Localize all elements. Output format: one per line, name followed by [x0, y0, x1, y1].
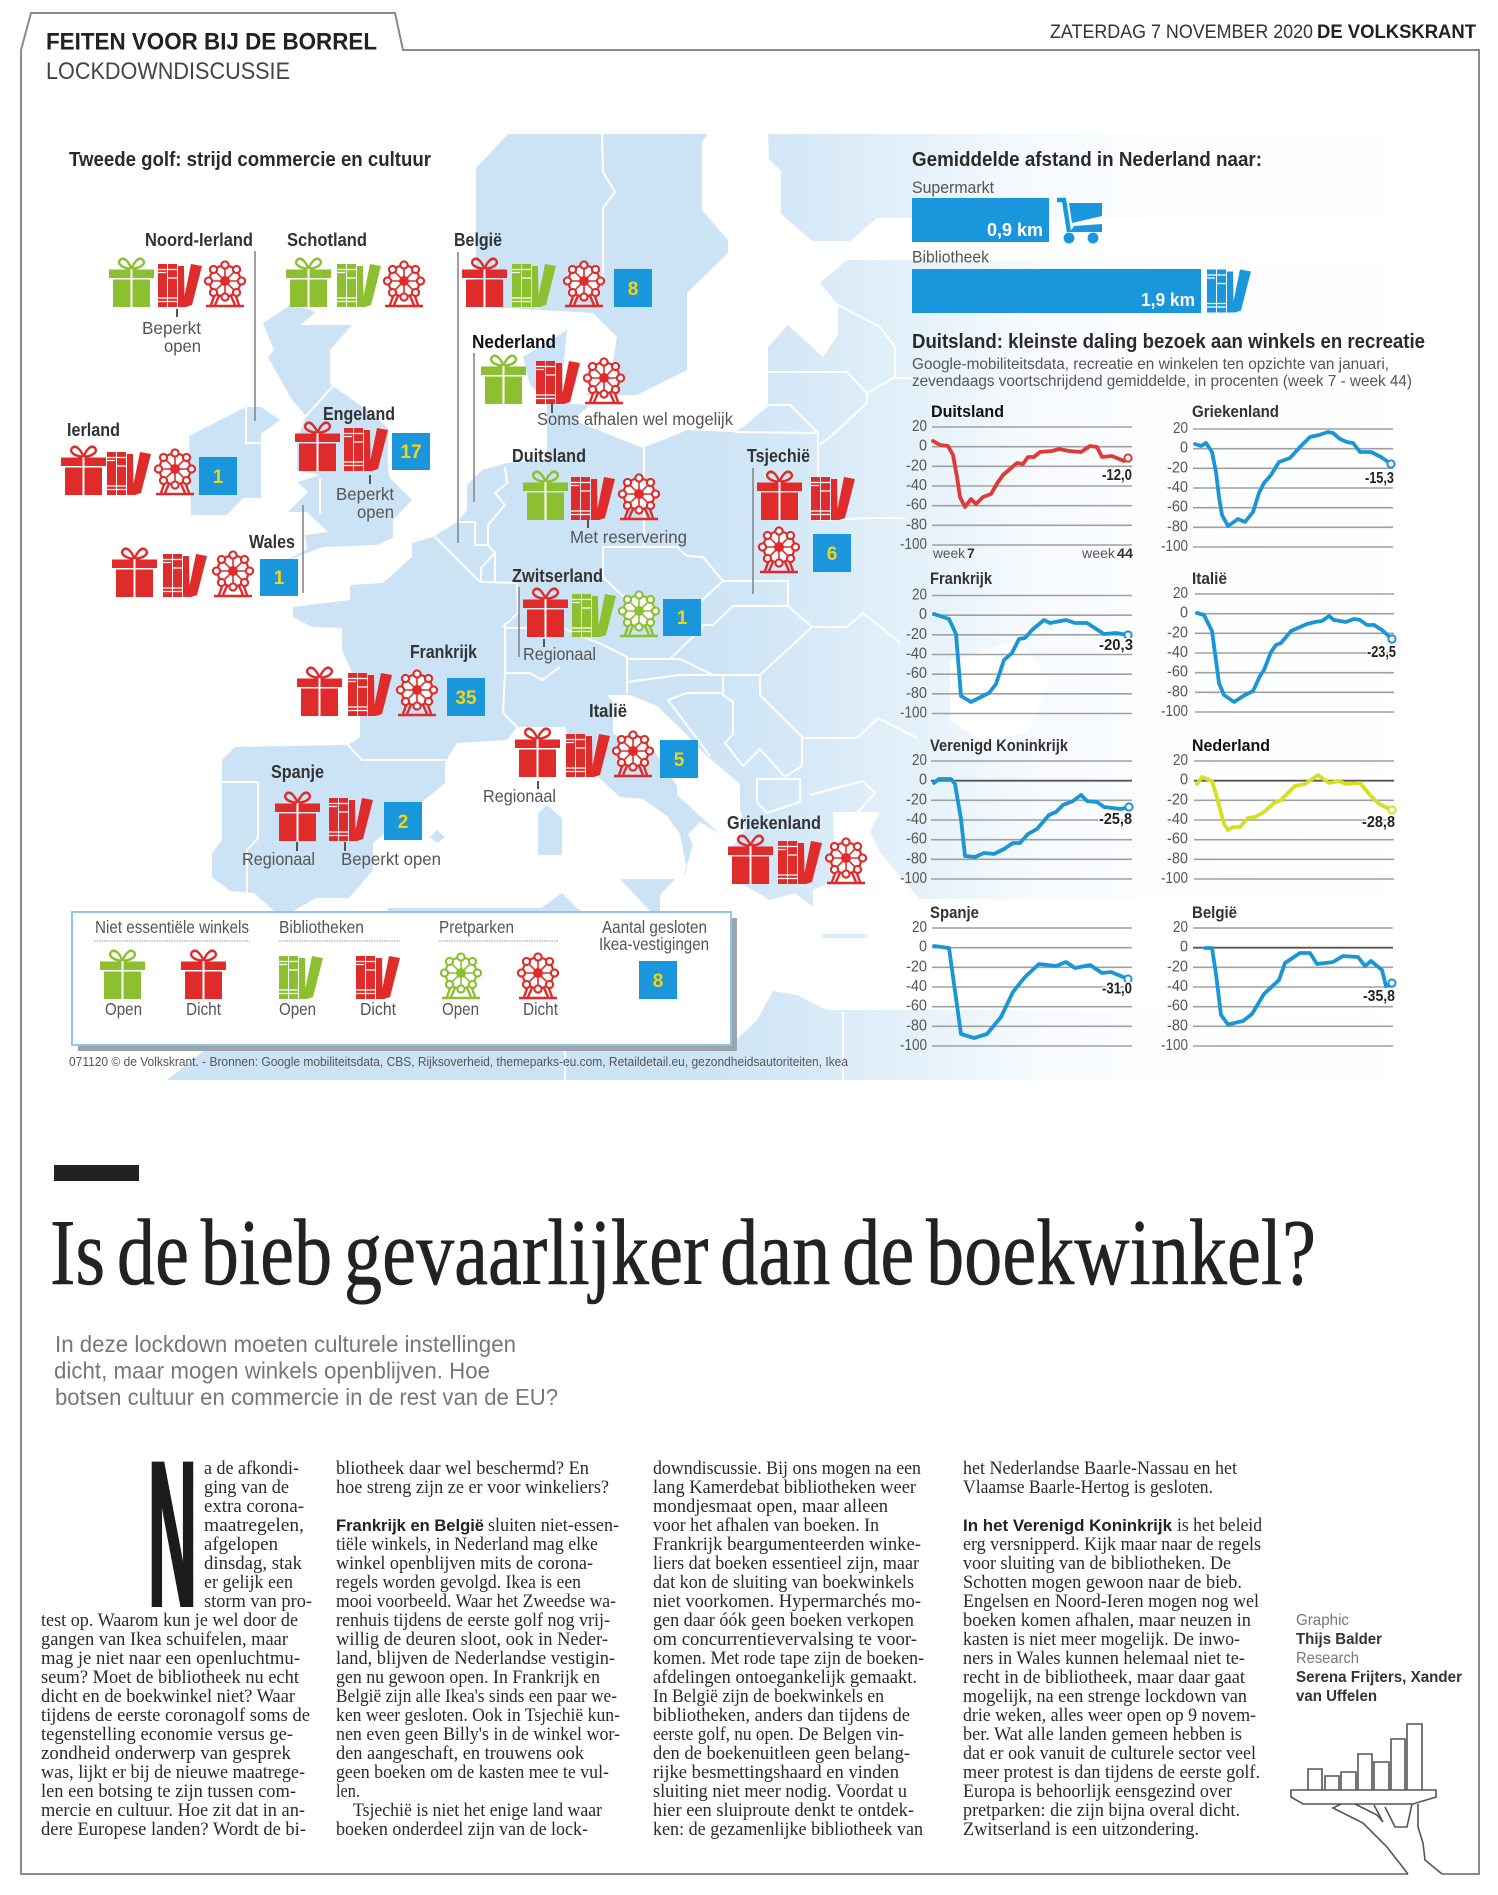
- country: Ierland: [61, 420, 237, 495]
- article column 3: eerste golf, nu open. De Belgen vin-: [653, 1725, 904, 1745]
- article column 4: [963, 1459, 1263, 1840]
- country: Griekenland: [727, 813, 866, 884]
- article column 2: sluiten niet-essen-: [488, 1516, 619, 1536]
- article column 2: len.: [336, 1782, 360, 1802]
- article column 1: dinsdag, stak: [204, 1554, 303, 1574]
- article column 3: niet voorkomen. Hypermarchés mo-: [653, 1592, 921, 1612]
- line chart: België: -35,8: [1363, 988, 1395, 1005]
- country: Nederland: Nederland: [472, 332, 556, 352]
- country: Zwitserland: Zwitserland: [512, 566, 603, 586]
- country: Spanje: Spanje: [271, 762, 324, 782]
- legend: 8: [653, 971, 663, 992]
- article column 3: rijke besmettingshaard en vinden: [653, 1763, 899, 1783]
- intro deck: [54, 1331, 558, 1410]
- article column 4: pretparken: die zijn bijna overal dicht.: [963, 1801, 1240, 1821]
- line chart: Verenigd Koninkrijk: -25,8: [1099, 811, 1132, 828]
- dateline: [1050, 21, 1476, 43]
- legend: Open: [442, 999, 479, 1019]
- legend: Dicht: [360, 999, 396, 1019]
- article column 1: tijdens de eerste coronagolf soms de: [41, 1706, 310, 1726]
- article column 2: willig de deuren sloot, ook in Neder-: [336, 1630, 608, 1650]
- line chart: België: 20: [1173, 919, 1188, 936]
- country: Frankrijk: Frankrijk: [410, 642, 478, 662]
- line chart: Nederland: -20: [1167, 791, 1188, 808]
- article column 2: gen nu gewoon open. In Frankrijk en: [336, 1668, 600, 1688]
- country: Tsjechië: 6: [827, 544, 837, 565]
- country: Engeland: open: [357, 502, 394, 522]
- country: Noord-Ierland: open: [164, 336, 201, 356]
- line chart: Nederland: -80: [1167, 850, 1188, 867]
- credits: [1296, 1612, 1462, 1705]
- country: Duitsland: [512, 446, 687, 547]
- line chart: Frankrijk: -60: [906, 665, 927, 682]
- credits: van Uffelen: [1296, 1688, 1377, 1705]
- article column 4: is het beleid: [1177, 1516, 1263, 1536]
- legend: Open: [105, 999, 142, 1019]
- article column 1: was, lijkt er bij de nieuwe maatrege-: [41, 1763, 305, 1783]
- chart intro heading: zevendaags voortschrijdend gemiddelde, in procenten (week 7 - week 44): [912, 373, 1412, 390]
- chart intro heading: [912, 330, 1425, 390]
- country: Duitsland: Met reservering: [570, 527, 687, 547]
- panel: average distance bars: Bibliotheek: [912, 248, 990, 266]
- line chart: België: -80: [1167, 1017, 1188, 1034]
- chart intro heading: Google-mobiliteitsdata, recreatie en winkelen ten opzichte van januari,: [912, 356, 1389, 373]
- country: Zwitserland: [512, 566, 701, 664]
- article column 4: het Nederlandse Baarle-Nassau en het: [963, 1459, 1238, 1479]
- country: Engeland: Beperkt: [336, 484, 394, 504]
- article column 3: [653, 1459, 924, 1840]
- line chart: Verenigd Koninkrijk: Verenigd Koninkrijk: [930, 737, 1069, 755]
- legend: Ikea-vestigingen: [599, 934, 709, 954]
- panel: average distance bars: 0,9 km: [987, 219, 1043, 240]
- article column 2: tiële winkels, in Nederland mag elke: [336, 1535, 598, 1555]
- line chart: Griekenland: -20: [1167, 459, 1188, 476]
- article column 1: mercie en cultuur. Hoe zit dat in an-: [41, 1801, 305, 1821]
- article column 1: zondheid onderwerp van gesprek: [41, 1744, 292, 1764]
- background map of Europe: [167, 134, 1448, 1080]
- line chart: Verenigd Koninkrijk: [900, 737, 1133, 887]
- article column 4: Schotten mogen gewoon naar de bieb.: [963, 1573, 1242, 1593]
- country: Nederland: Soms afhalen wel mogelijk: [537, 409, 733, 429]
- country: Ierland: 1: [213, 467, 224, 488]
- article column 1: extra corona-: [204, 1497, 304, 1517]
- section title: Feiten voor bij de borrel: FEITEN VOOR BIJ DE BORREL: [46, 28, 377, 56]
- panel: average distance bars: Gemiddelde afstand in Nederland naar:: [912, 148, 1262, 171]
- country: Wales: [112, 505, 303, 597]
- article column 4: boeken komen afhalen, maar neuzen in: [963, 1611, 1251, 1631]
- line chart: Italië: -20: [1167, 624, 1188, 641]
- article column 2: [336, 1459, 620, 1840]
- line chart: Frankrijk: -40: [906, 646, 927, 662]
- article column 4: drie weken, alles weer open op 9 novem-: [963, 1706, 1256, 1726]
- country: Frankrijk: 35: [455, 688, 477, 709]
- article column 3: liers dat boeken essentieel zijn, maar: [653, 1554, 919, 1574]
- article column 4: Zwitserland is een uitzondering.: [963, 1820, 1199, 1840]
- line chart: Italië: [1161, 570, 1396, 720]
- legend: Dicht: [186, 999, 221, 1019]
- line chart: Italië: -100: [1161, 703, 1188, 720]
- chart intro heading: Duitsland: kleinste daling bezoek aan winkels en recreatie: [912, 330, 1425, 353]
- line chart: Italië: 20: [1173, 585, 1188, 602]
- line chart: Nederland: Nederland: [1192, 737, 1270, 755]
- line chart: België: -40: [1167, 978, 1188, 995]
- legend: Aantal gesloten: [602, 917, 707, 937]
- line chart: Duitsland: 0: [919, 438, 927, 455]
- line chart: Griekenland: -100: [1161, 538, 1188, 555]
- article column 1: ging van de: [204, 1478, 289, 1498]
- line chart: Italië: -80: [1167, 683, 1188, 700]
- article column 3: downdiscussie. Bij ons mogen na een: [653, 1459, 921, 1479]
- line chart: Frankrijk: -20,3: [1099, 637, 1133, 654]
- article column 4: ber. Wat alle landen gemeen hebben is: [963, 1725, 1242, 1745]
- article column 1: dicht en de boekwinkel niet? Waar: [41, 1687, 295, 1707]
- legend: [72, 912, 737, 1051]
- line chart: Nederland: 20: [1173, 752, 1188, 769]
- article column 2: België zijn alle Ikea's sinds een paar we-: [336, 1687, 617, 1707]
- map heading: Tweede golf: strijd commercie en cultuur: [69, 148, 431, 171]
- line chart: Griekenland: 0: [1180, 440, 1188, 457]
- line chart: Duitsland: week: [1081, 545, 1116, 561]
- country: Wales: Wales: [249, 532, 295, 552]
- article column 3: sluiting niet meer nodig. Voordat u: [653, 1782, 907, 1802]
- line chart: Griekenland: -60: [1167, 499, 1188, 516]
- line chart: Spanje: -20: [906, 958, 927, 975]
- article column 1: seum? Moet de bibliotheek nu echt: [41, 1668, 300, 1688]
- line chart: Spanje: -60: [906, 998, 927, 1015]
- article column 1: maatregelen,: [204, 1516, 304, 1536]
- article column 1: [41, 1459, 312, 1840]
- line chart: Spanje: -80: [906, 1017, 927, 1034]
- article column 3: den de boekenuitleen geen belang-: [653, 1744, 910, 1764]
- country: Spanje: 2: [398, 812, 408, 833]
- legend: Bibliotheken: [279, 917, 364, 937]
- article column 1: er gelijk een: [204, 1573, 293, 1593]
- line chart: Duitsland: week: [932, 545, 966, 561]
- section title: Feiten voor bij de borrel: LOCKDOWNDISCUSSIE: [46, 58, 290, 85]
- dateline: DE VOLKSKRANT: [1317, 21, 1476, 43]
- intro deck: botsen cultuur en commercie in de rest van de EU?: [55, 1384, 558, 1410]
- credits: Thijs Balder: [1296, 1631, 1382, 1648]
- line chart: Duitsland: -40: [906, 477, 927, 494]
- country: Schotland: [286, 230, 424, 307]
- country: België: België: [454, 230, 502, 250]
- legend: Niet essentiële winkels: [95, 917, 249, 937]
- country: Frankrijk: [297, 642, 485, 716]
- article column 4: mogelijk, na een strenge lockdown van: [963, 1687, 1247, 1707]
- panel: average distance bars: Supermarkt: [912, 179, 994, 197]
- line chart: Verenigd Koninkrijk: -60: [906, 831, 927, 848]
- country: Spanje: Regionaal: [242, 849, 315, 869]
- country: Noord-Ierland: [109, 230, 255, 421]
- article column 3: komen. Met rode tape zijn de boeken-: [653, 1649, 924, 1669]
- line chart: Spanje: [900, 904, 1132, 1054]
- country: Nederland: [472, 332, 733, 502]
- country: Italië: Italië: [589, 701, 627, 721]
- line chart: Italië: 0: [1180, 605, 1188, 622]
- article column 2: boeken onderdeel zijn van de lock-: [336, 1820, 588, 1840]
- country: Italië: 5: [674, 750, 685, 771]
- line chart: Nederland: -100: [1161, 870, 1188, 887]
- article column 4: dat er ook vanuit de culturele sector veel: [963, 1744, 1256, 1764]
- article column 3: afdelingen ontoegankelijk gemaakt.: [653, 1668, 917, 1688]
- article column 4: Europa is behoorlijk eensgezind over: [963, 1782, 1232, 1802]
- country: Italië: [483, 701, 698, 806]
- article column 2: bliotheek daar wel beschermd? En: [336, 1459, 589, 1479]
- line chart: Duitsland: -20: [906, 457, 927, 474]
- line chart: Verenigd Koninkrijk: -80: [906, 850, 927, 867]
- line chart: België: -20: [1167, 958, 1188, 975]
- article column 3: bibliotheken, anders dan tijdens de: [653, 1706, 910, 1726]
- line chart: Frankrijk: 0: [919, 606, 927, 623]
- section title: Feiten voor bij de borrel: [46, 28, 377, 85]
- article column 2: mooi voorbeeld. Waar het Zweedse wa-: [336, 1592, 616, 1612]
- legend: Open: [279, 999, 316, 1019]
- country: Ierland: Ierland: [67, 420, 120, 440]
- credits: Serena Frijters, Xander: [1296, 1669, 1462, 1686]
- article column 3: hier een sluiproute denkt te ontdek-: [653, 1801, 914, 1821]
- legend: Dicht: [523, 999, 558, 1019]
- article column 4: recht in de bibliotheek, maar daar gaat: [963, 1668, 1246, 1688]
- article column 3: Frankrijk beargumenteerden winke-: [653, 1535, 921, 1555]
- panel: average distance bars: [912, 148, 1262, 313]
- line chart: Frankrijk: Frankrijk: [930, 570, 993, 588]
- article column 1: dere Europese landen? Wordt de bi-: [41, 1820, 306, 1840]
- country: Engeland: 17: [400, 442, 422, 463]
- article column 4: ners in Wales kunnen helemaal niet te-: [963, 1649, 1245, 1669]
- country: Spanje: [242, 762, 441, 869]
- line chart: Griekenland: -40: [1167, 479, 1188, 496]
- line chart: Griekenland: -15,3: [1365, 470, 1394, 487]
- line chart: Spanje: 20: [912, 919, 927, 936]
- article column 2: Frankrijk en België: [336, 1516, 484, 1535]
- article column 2: renhuis tijdens de eerste golf nog vrij-: [336, 1611, 610, 1631]
- article column 4: meer protest is dan tijdens de eerste golf.: [963, 1763, 1260, 1783]
- line chart: Verenigd Koninkrijk: -100: [900, 870, 927, 887]
- article column 3: ken: de gezamenlijke bibliotheek van: [653, 1820, 923, 1840]
- article column 1: test op. Waarom kun je wel door de: [41, 1611, 298, 1631]
- line chart: Spanje: -40: [906, 978, 927, 995]
- country: Wales: 1: [274, 568, 285, 589]
- article column 3: mondjesmaat open, maar alleen: [653, 1497, 888, 1517]
- line chart: Duitsland: 20: [912, 418, 927, 435]
- country: Italië: Regionaal: [483, 786, 556, 806]
- line chart: Griekenland: Griekenland: [1192, 403, 1279, 421]
- source note: 071120 © de Volkskrant. - Bronnen: Google mobiliteitsdata, CBS, Rijksoverheid, themeparks-eu.com, Retaildetail.eu, gezondheidsautoriteiten, Ikea: [69, 1055, 848, 1069]
- article column 2: nen even geen Billy's in de winkel wor-: [336, 1725, 620, 1745]
- line chart: Verenigd Koninkrijk: 20: [912, 752, 927, 769]
- icon: shopping cart: [1057, 200, 1102, 243]
- line chart: Verenigd Koninkrijk: -40: [906, 811, 927, 828]
- line chart: België: 0: [1180, 939, 1188, 956]
- line chart: Nederland: 0: [1180, 772, 1188, 789]
- article column 3: gen daar óók geen boeken verkopen: [653, 1611, 914, 1631]
- article column 4: voor sluiting van de bibliotheken. De: [963, 1554, 1231, 1574]
- article column 3: om concurrentievervalsing te voor-: [653, 1630, 917, 1650]
- line chart: Duitsland: [900, 403, 1133, 561]
- line chart: België: België: [1192, 904, 1237, 922]
- line chart: België: [1161, 904, 1396, 1054]
- country: Tsjechië: Tsjechië: [747, 446, 810, 466]
- article column 4: Vlaamse Baarle-Hertog is gesloten.: [963, 1478, 1213, 1498]
- line chart: Italië: -23,5: [1367, 644, 1396, 661]
- line chart: Duitsland: 44: [1117, 545, 1133, 561]
- dateline: ZATERDAG 7 NOVEMBER 2020: [1050, 21, 1313, 43]
- line chart: Frankrijk: 20: [912, 586, 927, 604]
- article column 2: Tsjechië is niet het enige land waar: [353, 1801, 602, 1821]
- country: Zwitserland: Regionaal: [523, 644, 596, 664]
- line chart: Duitsland: -60: [906, 497, 927, 514]
- line chart: Frankrijk: -100: [900, 704, 927, 722]
- country: Noord-Ierland: Noord-Ierland: [145, 230, 253, 250]
- article column 1: storm van pro-: [204, 1592, 312, 1612]
- line chart: Spanje: Spanje: [930, 904, 979, 922]
- article column 2: ken weer gesloten. Ook in Tsjechië kun-: [336, 1706, 620, 1726]
- country: Noord-Ierland: Beperkt: [142, 318, 201, 338]
- line chart: Italië: -60: [1167, 664, 1188, 681]
- country: Spanje: Beperkt open: [341, 849, 441, 869]
- line chart: België: -100: [1161, 1037, 1188, 1054]
- line chart: Nederland: -60: [1167, 831, 1188, 848]
- line chart: Spanje: 0: [919, 939, 927, 956]
- article column 1: gangen van Ikea schuifelen, maar: [41, 1630, 288, 1650]
- text: N: [148, 1420, 197, 1648]
- line chart: Frankrijk: -20: [906, 626, 927, 643]
- article column 3: lang Kamerdebat bibliotheken weer: [653, 1478, 916, 1498]
- article column 2: den aangeschaft, en trouwens ook: [336, 1744, 585, 1764]
- article column 2: hoe streng zijn ze er voor winkeliers?: [336, 1478, 609, 1498]
- article column 2: land, blijven de Nederlandse vestigin-: [336, 1649, 615, 1669]
- article column 3: In België zijn de boekwinkels en: [653, 1687, 884, 1707]
- line chart: Frankrijk: [900, 570, 1133, 722]
- icon: hand holding tray with bar chart: [1291, 1724, 1442, 1874]
- line chart: Verenigd Koninkrijk: -20: [906, 791, 927, 808]
- article column 1: a de afkondi-: [204, 1459, 299, 1479]
- credits: Research: [1296, 1650, 1359, 1667]
- line chart: Frankrijk: -80: [906, 685, 927, 702]
- article column 1: afgelopen: [204, 1535, 278, 1555]
- line chart: Griekenland: -80: [1167, 518, 1188, 535]
- line chart: Nederland: [1161, 737, 1396, 887]
- line chart: Verenigd Koninkrijk: 0: [919, 772, 927, 789]
- country: België: [454, 230, 652, 543]
- line chart: Italië: Italië: [1192, 570, 1227, 588]
- article column 2: geen boeken om de kasten mee te vul-: [336, 1763, 609, 1783]
- country: Schotland: Schotland: [287, 230, 367, 250]
- intro deck: In deze lockdown moeten culturele instellingen: [55, 1331, 516, 1357]
- article column 4: Engelsen en Noord-Ieren mogen nog wel: [963, 1592, 1259, 1612]
- legend: Pretparken: [439, 917, 514, 937]
- credits: Graphic: [1296, 1612, 1349, 1629]
- line chart: Duitsland: 7: [967, 545, 975, 561]
- line chart: Spanje: -31,0: [1102, 980, 1132, 998]
- line chart: Duitsland: -80: [906, 516, 927, 533]
- line chart: Nederland: -40: [1167, 811, 1188, 828]
- black bar above headline: [54, 1165, 139, 1181]
- article column 3: voor het afhalen van boeken. In: [653, 1516, 879, 1536]
- intro deck: dicht, maar mogen winkels openblijven. Hoe: [54, 1358, 490, 1384]
- country: Tsjechië: [747, 446, 855, 594]
- article column 1: mag je niet naar een openluchtmu-: [41, 1649, 300, 1669]
- country: Engeland: [295, 404, 430, 522]
- article column 3: dat kon de sluiting van boekwinkels: [653, 1573, 914, 1593]
- article column 4: kasten is niet meer mogelijk. De inwo-: [963, 1630, 1240, 1650]
- line chart: Duitsland: Duitsland: [931, 403, 1004, 421]
- country: België: 8: [628, 279, 638, 300]
- line chart: België: -60: [1167, 998, 1188, 1015]
- country: Zwitserland: 1: [677, 608, 688, 629]
- line chart: Duitsland: -100: [900, 536, 927, 553]
- line chart: Griekenland: [1161, 403, 1395, 555]
- line chart: Duitsland: -12,0: [1102, 467, 1132, 484]
- article column 1: len een botsing te zijn tussen com-: [41, 1782, 296, 1802]
- country: Duitsland: Duitsland: [512, 446, 586, 466]
- article column 4: erg versnipperd. Kijk maar naar de regels: [963, 1535, 1261, 1555]
- line chart: Griekenland: 20: [1173, 420, 1188, 437]
- article column 2: regels worden gevolgd. Ikea is een: [336, 1573, 581, 1593]
- country: Engeland: Engeland: [323, 404, 395, 424]
- line chart: Nederland: -28,8: [1362, 814, 1395, 831]
- line chart: Italië: -40: [1167, 644, 1188, 661]
- article column 1: tegenstelling economie versus ge-: [41, 1725, 293, 1745]
- line chart: Spanje: -100: [900, 1037, 927, 1054]
- country: Griekenland: Griekenland: [727, 813, 821, 833]
- panel: average distance bars: 1,9 km: [1141, 289, 1195, 310]
- article column 4: In het Verenigd Koninkrijk: [963, 1516, 1173, 1535]
- article column 2: winkel openblijven mits de corona-: [336, 1554, 593, 1574]
